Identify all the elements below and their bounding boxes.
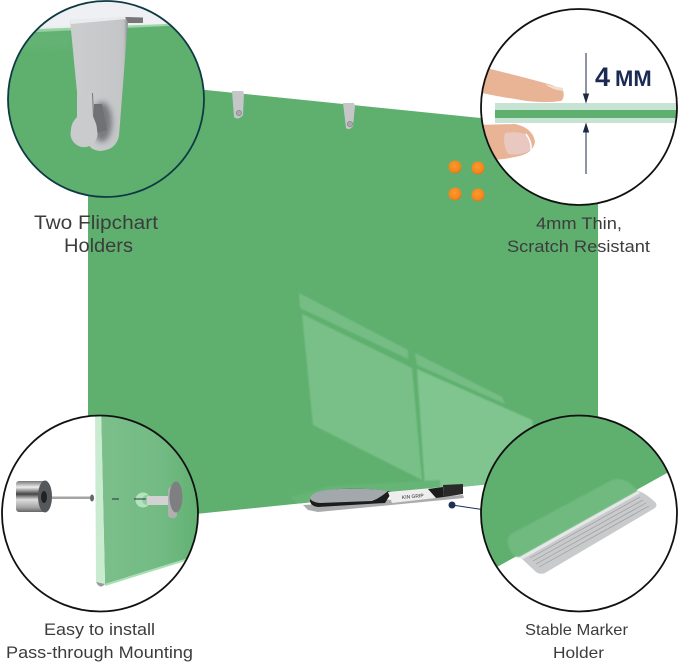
label: stable marker holder: Stable Marker — [525, 622, 629, 639]
panel: 4mm thickness detail — [478, 9, 679, 205]
label: two flipchart holders: Two Flipchart — [34, 213, 159, 234]
icon: mounting cap and bolt — [112, 482, 182, 518]
label: two flipchart holders — [34, 213, 159, 257]
label: easy to install — [6, 620, 193, 662]
4 mm label: 4MM — [595, 62, 652, 92]
small flipchart holder right — [343, 103, 355, 129]
icon: screw — [52, 494, 94, 502]
label: easy to install: Pass-through Mounting — [6, 643, 193, 662]
orange magnets — [448, 160, 484, 202]
glass cross-section band — [495, 103, 679, 123]
label: 4mm thin scratch resistant — [507, 214, 650, 256]
label: stable marker holder: Holder — [553, 645, 605, 662]
icon: silver tray — [520, 491, 656, 574]
panel: flipchart holder detail — [0, 0, 212, 197]
callout connector dot — [448, 502, 482, 510]
label: easy to install: Easy to install — [44, 620, 155, 639]
label: 4mm thin scratch resistant: Scratch Resistant — [507, 237, 650, 256]
icon: bottom finger — [478, 124, 535, 160]
label: two flipchart holders: Holders — [64, 236, 133, 257]
thickness arrows — [584, 53, 588, 174]
panel: pass-through mounting detail — [2, 410, 205, 612]
green glass board — [88, 78, 598, 525]
icon: top finger — [483, 68, 564, 102]
label: stable marker holder — [525, 622, 629, 662]
icon: metal standoff barrel — [16, 480, 52, 512]
glass panel face and edge — [95, 410, 205, 587]
marker and eraser on tray: KIN GRIP — [402, 493, 425, 501]
label: 4mm thin scratch resistant: 4mm Thin, — [536, 214, 622, 233]
icon: large holder clip — [70, 17, 143, 151]
panel: marker holder detail — [470, 415, 679, 612]
small flipchart holder left — [232, 91, 244, 119]
marker and eraser on tray — [303, 484, 464, 512]
window reflection on board — [290, 293, 540, 505]
